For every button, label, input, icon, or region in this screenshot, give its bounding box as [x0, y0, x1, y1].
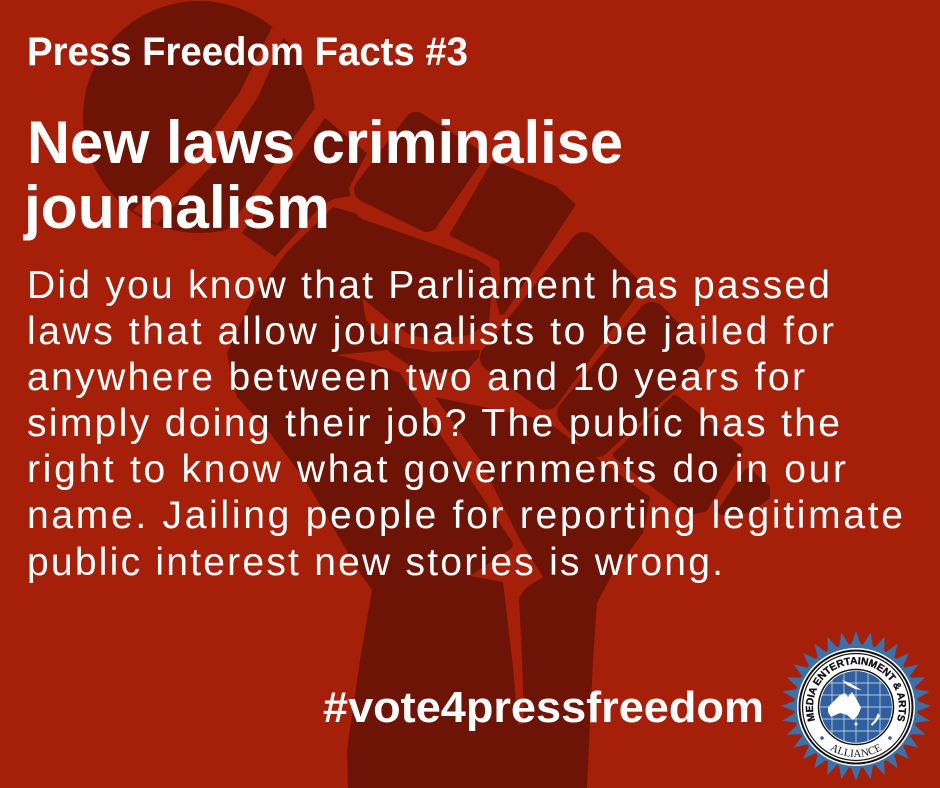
body paragraph: right to know what governments do in our	[27, 448, 846, 491]
seal rays	[769, 619, 940, 788]
globe	[820, 671, 892, 743]
logo: Media Entertainment & Arts Alliance seal	[781, 631, 931, 781]
body paragraph	[27, 264, 903, 584]
thumb outline strips	[337, 298, 545, 725]
body paragraph: simply doing their job? The public has the	[27, 402, 840, 445]
fingers	[366, 124, 766, 511]
logo: Media Entertainment & Arts Alliance seal: ALLIANCE	[830, 744, 882, 758]
seal lettering	[813, 664, 899, 730]
icon: raised fist holding microphone	[83, 1, 766, 788]
microphone head	[83, 1, 340, 250]
title	[23, 109, 623, 241]
title: New laws criminalise	[27, 109, 623, 176]
Australia, PNG, Tasmania and New Zealand	[828, 680, 880, 726]
body paragraph: laws that allow journalists to be jailed for	[27, 310, 834, 353]
logo: Media Entertainment & Arts Alliance seal: MEDIA ENTERTAINMENT & ARTS	[806, 656, 906, 722]
body paragraph: anywhere between two and 10 years for	[27, 356, 805, 399]
label: series heading: Press Freedom Facts #3	[27, 30, 468, 74]
title: journalism	[23, 174, 330, 241]
hashtag: #vote4pressfreedom	[323, 683, 764, 732]
microphone handle	[242, 118, 367, 257]
fist palm and forearm	[227, 207, 650, 788]
body paragraph: name. Jailing people for reporting legitimate	[27, 494, 903, 537]
seal rings	[797, 648, 915, 766]
body paragraph: Did you know that Parliament has passed	[27, 264, 830, 307]
body paragraph: public interest new stories is wrong.	[27, 541, 723, 584]
